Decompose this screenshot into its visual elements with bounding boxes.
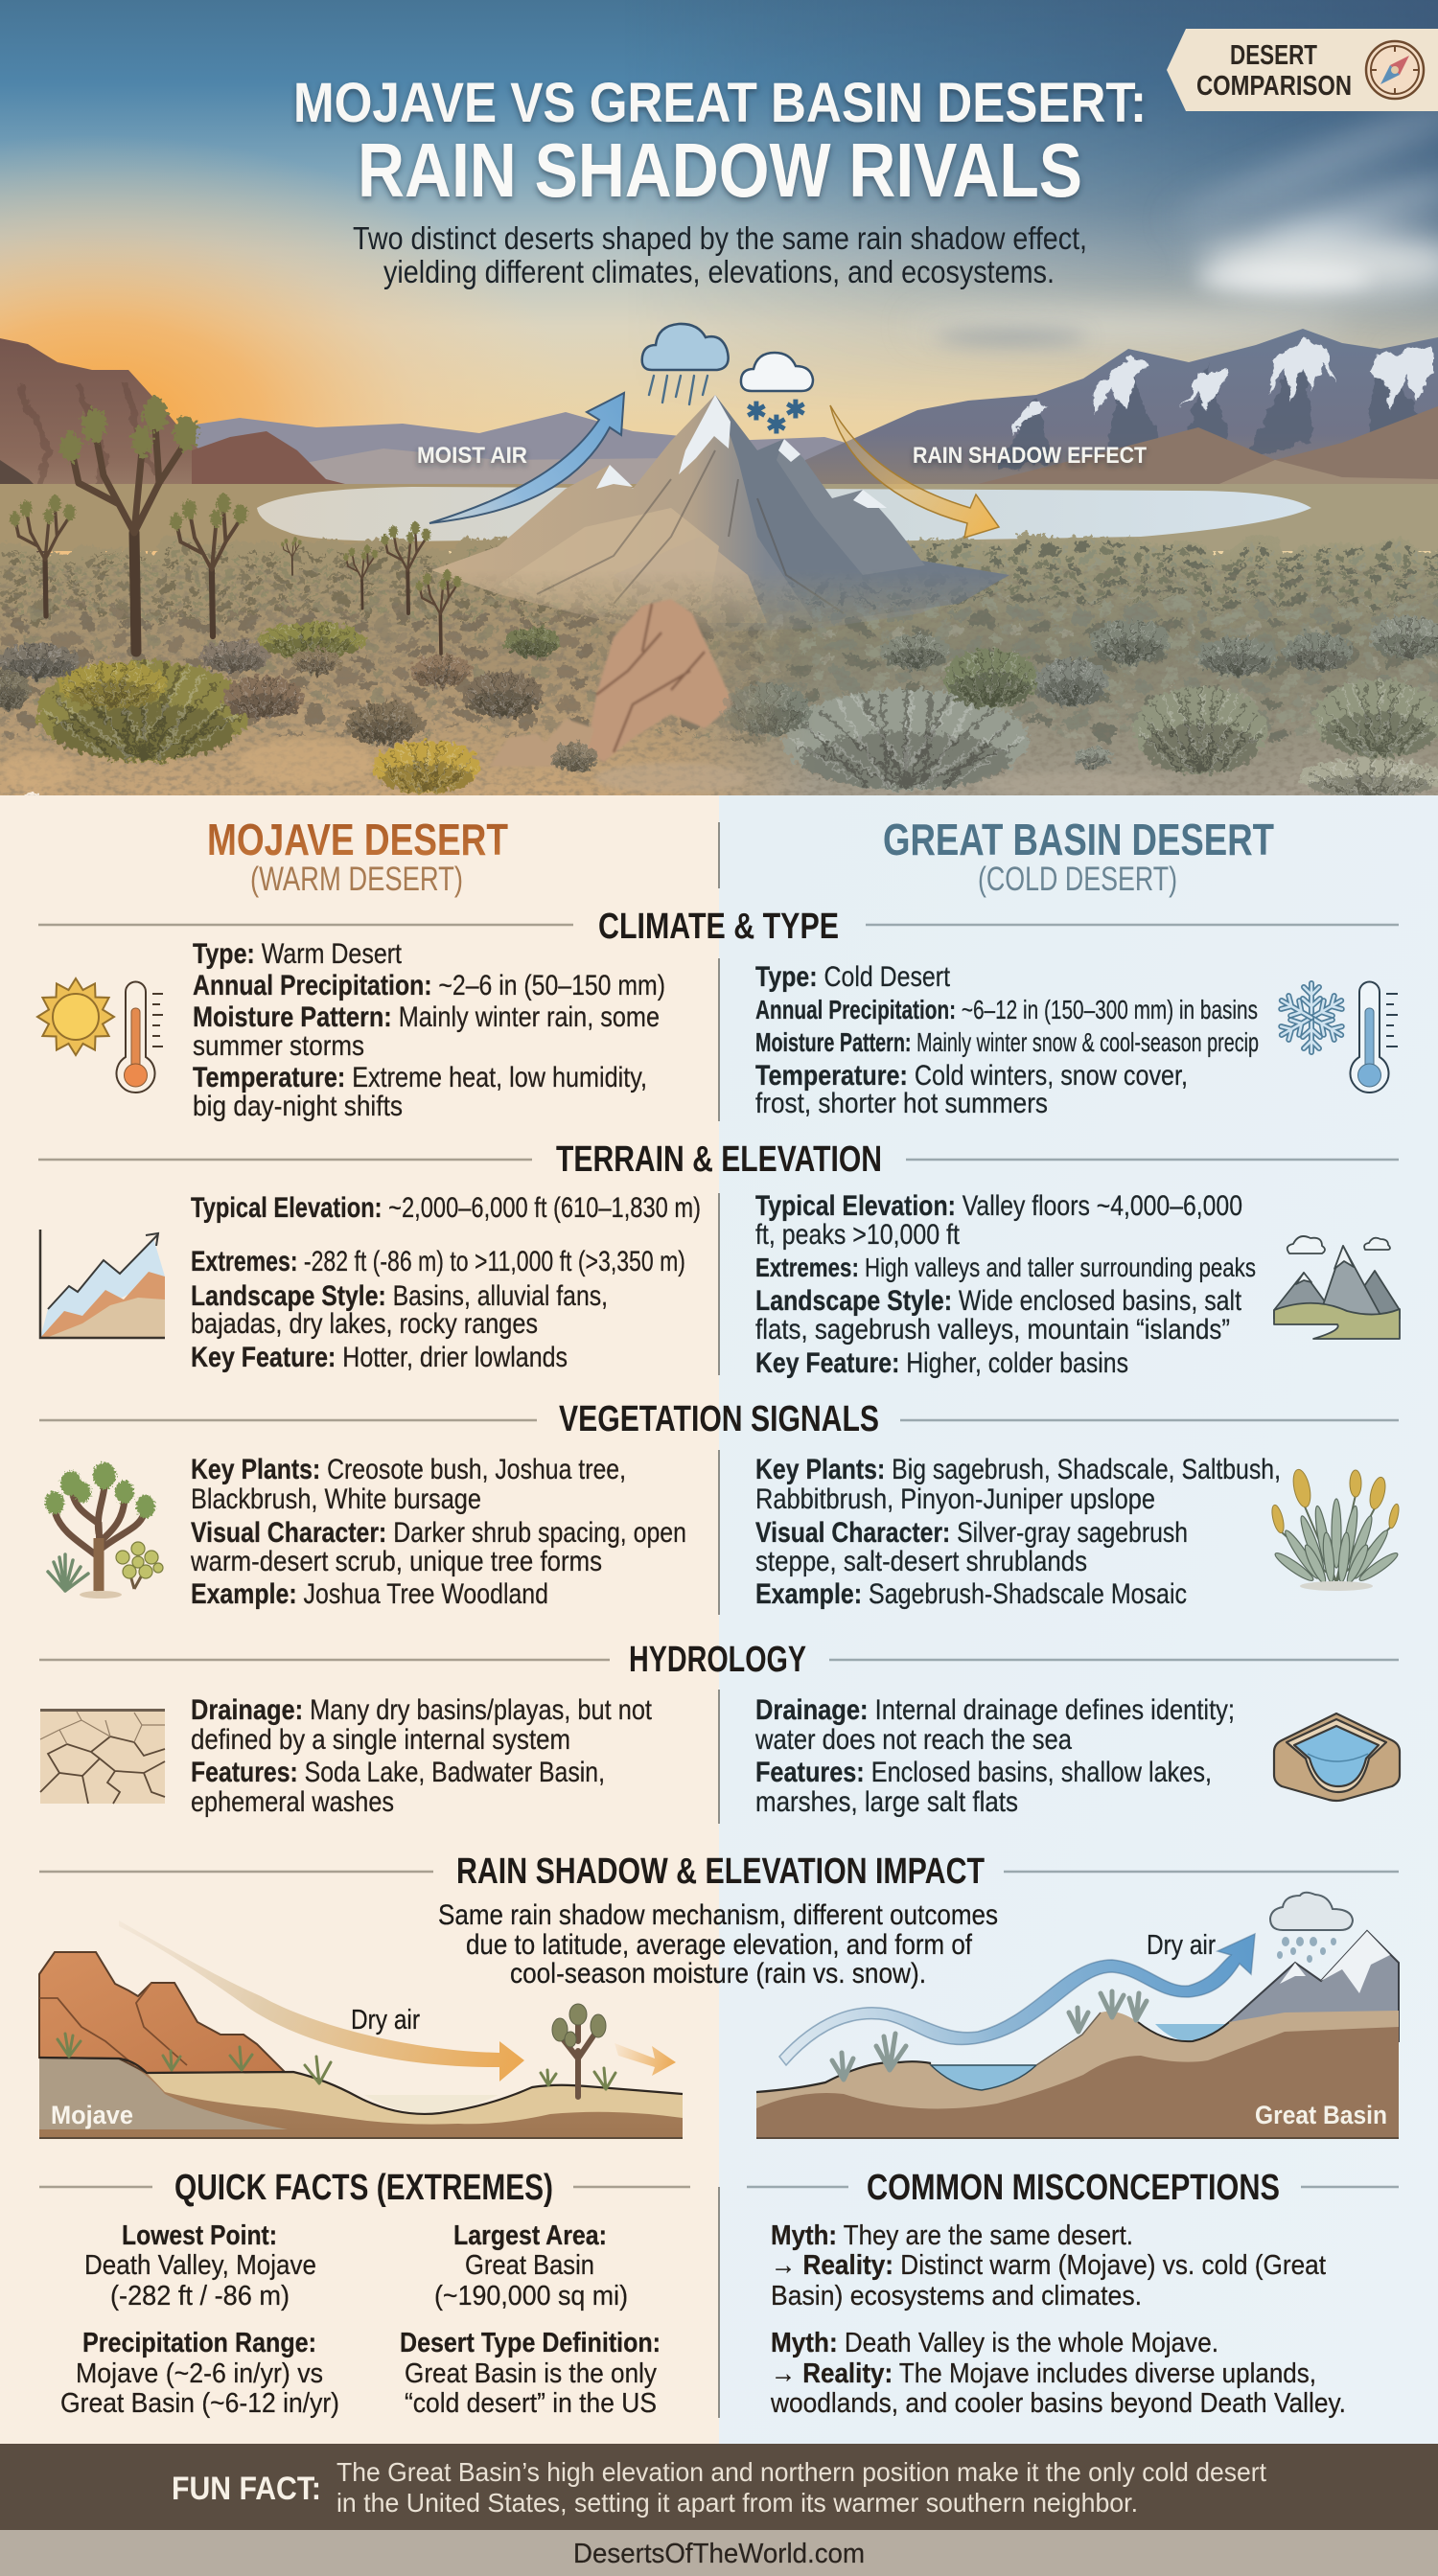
icon: snow cloud: ✱ (766, 410, 787, 439)
mountains (1229, 1931, 1399, 2041)
text: great basin climate: Annual Precipitation: ~6–12 in (150–300 mm) in basins (755, 995, 1258, 1024)
heading: great basin desert: GREAT BASIN DESERT (883, 815, 1274, 864)
label: rain shadow effect: RAIN SHADOW EFFECT (913, 443, 1147, 469)
text: great basin climate (755, 961, 1259, 1119)
text: mojave hydrology: Drainage: Many dry basins/playas, but not (191, 1694, 653, 1726)
misconception two: → Reality: The Mojave includes diverse uplands, (771, 2358, 1316, 2389)
footer (0, 2530, 1438, 2576)
diagram: great basin cross-section (756, 1893, 1399, 2138)
arrow: dry air descending (119, 1920, 524, 2082)
quick fact: lowest point: Lowest Point: (122, 2220, 277, 2251)
text: great basin climate: frost, shorter hot summers (755, 1088, 1048, 1119)
quick fact: lowest point (84, 2220, 316, 2312)
label: moist air: MOIST AIR (417, 443, 527, 469)
text: mojave terrain: Key Feature: Hotter, drier lowlands (191, 1342, 568, 1373)
icon: compass (1366, 41, 1424, 99)
icon: cold thermometer (1350, 981, 1398, 1092)
panel: great basin background (719, 795, 1438, 2444)
quick fact: desert type definition: “cold desert” in the US (405, 2388, 657, 2419)
text: mojave terrain: bajadas, dry lakes, rocky ranges (191, 1308, 538, 1340)
text: mojave vegetation (190, 1454, 686, 1610)
hero illustration: desert landscape split (0, 0, 1438, 811)
rock outcrop (489, 599, 733, 767)
ground warm side (0, 542, 987, 811)
text: mojave climate: summer storms (193, 1030, 364, 1062)
text: great basin vegetation: Key Plants: Big sagebrush, Shadscale, Saltbush, (755, 1454, 1281, 1485)
text: mojave hydrology: ephemeral washes (191, 1786, 394, 1818)
distant mountains (182, 412, 911, 508)
misconception two (770, 2328, 1346, 2419)
footer: DesertsOfTheWorld.com (573, 2539, 865, 2569)
misconception two: Myth: Death Valley is the whole Mojave. (771, 2328, 1218, 2358)
quick fact: desert type definition: Great Basin is the only (405, 2358, 657, 2389)
text: great basin terrain: flats, sagebrush valleys, mountain “islands” (755, 1314, 1230, 1346)
text: mojave vegetation: Visual Character: Darker shrub spacing, open (191, 1517, 686, 1549)
text: mojave hydrology: Features: Soda Lake, Badwater Basin, (191, 1757, 605, 1788)
text: mojave vegetation: warm-desert scrub, unique tree forms (190, 1546, 602, 1577)
text: great basin terrain: ft, peaks >10,000 ft (755, 1219, 961, 1251)
quick fact: lowest point: Death Valley, Mojave (84, 2250, 316, 2281)
icon: cloud with snow pellets (1270, 1893, 1353, 1963)
fun fact band: FUN FACT: (172, 2471, 321, 2507)
section heading: rain shadow and elevation impact: RAIN SHADOW & ELEVATION IMPACT (456, 1852, 985, 1892)
central mountain (431, 395, 1009, 632)
icon: mountains and clouds (1274, 1236, 1400, 1339)
icon: snowflake (1277, 983, 1346, 1052)
text: mojave climate: big day-night shifts (193, 1091, 403, 1122)
badge: desert comparison: DESERT (1230, 40, 1317, 71)
text: mojave vegetation: Example: Joshua Tree Woodland (191, 1578, 548, 1610)
arrow: dry air exit (615, 2043, 676, 2076)
title line 1: MOJAVE VS GREAT BASIN DESERT: (293, 72, 1147, 134)
text: mojave hydrology (191, 1694, 653, 1818)
text: great basin vegetation: steppe, salt-desert shrublands (755, 1546, 1087, 1577)
text: great basin terrain (755, 1190, 1256, 1379)
text: great basin hydrology: Drainage: Internal drainage defines identity; (755, 1694, 1235, 1726)
heading: great basin desert: (COLD DESERT) (978, 861, 1177, 898)
quick fact: desert type definition: Desert Type Definition: (400, 2328, 661, 2358)
text: rain shadow description: cool-season moisture (rain vs. snow). (510, 1958, 926, 1990)
clear dirt patches (0, 739, 1170, 795)
heading: common misconceptions: COMMON MISCONCEPTIONS (867, 2168, 1280, 2208)
fun fact band: The Great Basin’s high elevation and northern position make it the only cold desert (336, 2457, 1266, 2487)
quick fact: precipitation range (60, 2328, 339, 2419)
fun fact band (0, 2444, 1438, 2530)
text: mojave hydrology: defined by a single internal system (191, 1724, 570, 1756)
icon: elevation chart (40, 1230, 165, 1338)
text: great basin vegetation (755, 1454, 1281, 1610)
subtitle: yielding different climates, elevations, and ecosystems. (383, 254, 1055, 289)
text: great basin terrain: Extremes: High valleys and taller surrounding peaks (755, 1253, 1256, 1282)
heading: mojave desert: MOJAVE DESERT (207, 815, 508, 864)
left mountains (0, 338, 431, 565)
foreground sage shrubs (723, 616, 1438, 797)
text: rain shadow description: due to latitude, average elevation, and form of (466, 1929, 973, 1961)
misconception one: Myth: They are the same desert. (771, 2220, 1133, 2251)
ground cool side (686, 530, 1438, 795)
text: mojave vegetation: Key Plants: Creosote bush, Joshua tree, (191, 1454, 626, 1485)
icon: enclosed basin (1274, 1714, 1400, 1801)
right mountains (805, 329, 1438, 508)
heading: quick facts: QUICK FACTS (EXTREMES) (174, 2168, 553, 2208)
text: rain shadow description: Same rain shadow mechanism, different outcomes (438, 1899, 998, 1931)
label: great basin: Great Basin (1255, 2101, 1387, 2129)
quick fact: largest area: Largest Area: (453, 2220, 607, 2251)
badge: desert comparison: COMPARISON (1196, 71, 1352, 102)
label: mojave: Mojave (51, 2101, 133, 2129)
subtitle (353, 220, 1087, 289)
quick fact: precipitation range: Mojave (~2-6 in/yr) vs (76, 2358, 323, 2389)
text: great basin hydrology: marshes, large salt flats (755, 1786, 1018, 1818)
text: great basin climate: Moisture Pattern: Mainly winter snow & cool-season precip (755, 1027, 1259, 1057)
label: dry air: Dry air (1147, 1930, 1216, 1961)
sky (0, 0, 1438, 594)
icon: joshua tree small (552, 2004, 606, 2097)
quick fact: precipitation range: Precipitation Range: (82, 2328, 316, 2358)
diagram: mojave cross-section (39, 1920, 683, 2138)
icon: sagebrush (1270, 1468, 1401, 1591)
desert plants (58, 2034, 615, 2089)
quick fact: largest area: (~190,000 sq mi) (434, 2281, 628, 2312)
text: mojave terrain: Typical Elevation: ~2,000–6,000 ft (610–1,830 m) (191, 1192, 701, 1224)
text: great basin hydrology: water does not reach the sea (754, 1724, 1072, 1756)
misconception one: → Reality: Distinct warm (Mojave) vs. cold (Great (771, 2250, 1326, 2281)
text: mojave climate: Type: Warm Desert (193, 938, 403, 970)
text: great basin climate: Type: Cold Desert (755, 961, 951, 993)
icon: hot thermometer (117, 981, 163, 1092)
Joshua trees (10, 397, 461, 654)
misconception one: Basin) ecosystems and climates. (771, 2281, 1142, 2312)
icon: rain cloud (642, 324, 729, 404)
text: great basin terrain: Typical Elevation: Valley floors ~4,000–6,000 (755, 1190, 1242, 1222)
badge: desert comparison (1167, 29, 1438, 111)
icon: sun (37, 978, 114, 1055)
text: great basin vegetation: Example: Sagebrush-Shadscale Mosaic (755, 1578, 1187, 1610)
sage shrubs (832, 1991, 1147, 2080)
text: mojave climate: Moisture Pattern: Mainly winter rain, some (193, 1001, 660, 1033)
text: great basin climate: Temperature: Cold winters, snow cover, (755, 1060, 1188, 1092)
icon: cracked playa (40, 1709, 165, 1804)
ground texture (0, 565, 1438, 795)
subtitle: Two distinct deserts shaped by the same rain shadow effect, (353, 220, 1087, 256)
text: mojave terrain: Landscape Style: Basins, alluvial fans, (191, 1280, 608, 1312)
quick fact: precipitation range: Great Basin (~6-12 in/yr) (60, 2388, 339, 2419)
section heading: climate and type: CLIMATE & TYPE (598, 907, 839, 947)
text: mojave climate: Annual Precipitation: ~2–6 in (50–150 mm) (193, 970, 665, 1001)
text: great basin hydrology (754, 1694, 1235, 1818)
text: mojave vegetation: Blackbrush, White bursage (191, 1484, 481, 1515)
misconception two: woodlands, and cooler basins beyond Death Valley. (770, 2388, 1346, 2419)
text: great basin vegetation: Visual Character: Silver-gray sagebrush (755, 1517, 1188, 1549)
text: great basin terrain: Key Feature: Higher, colder basins (755, 1347, 1128, 1379)
lake (257, 487, 1311, 541)
icon: joshua tree (45, 1462, 163, 1598)
text: mojave climate (193, 938, 665, 1122)
text: great basin hydrology: Features: Enclosed basins, shallow lakes, (755, 1757, 1212, 1788)
arrow: moist air (429, 393, 624, 523)
text: mojave terrain: Extremes: -282 ft (-86 m) to >11,000 ft (>3,350 m) (191, 1246, 685, 1277)
misconception one (771, 2220, 1326, 2312)
text: rain shadow description (438, 1899, 998, 1990)
quick fact: lowest point: (-282 ft / -86 m) (110, 2281, 290, 2312)
icon: snow cloud: ✱ (746, 397, 767, 426)
foreground warm shrubs (0, 622, 598, 793)
heading: mojave desert: (WARM DESERT) (250, 861, 463, 898)
label: dry air: Dry air (351, 2005, 420, 2036)
text: mojave climate: Temperature: Extreme heat, low humidity, (193, 1062, 647, 1093)
arrow: rain shadow (830, 405, 999, 538)
quick fact: desert type definition (400, 2328, 661, 2419)
quick fact: largest area: Great Basin (465, 2250, 594, 2281)
heading: mojave desert (207, 815, 508, 898)
text: mojave terrain (191, 1192, 701, 1373)
icon: snow cloud (741, 353, 813, 439)
quick fact: largest area (434, 2220, 628, 2312)
plains behind lake (0, 484, 1438, 551)
text: great basin vegetation: Rabbitbrush, Pinyon-Juniper upslope (755, 1484, 1155, 1515)
section heading: vegetation signals: VEGETATION SIGNALS (559, 1399, 879, 1439)
title line 2: RAIN SHADOW RIVALS (358, 127, 1082, 213)
text: great basin terrain: Landscape Style: Wide enclosed basins, salt (755, 1285, 1242, 1317)
section heading: hydrology: HYDROLOGY (629, 1640, 806, 1680)
heading: great basin desert (883, 815, 1274, 898)
section heading: terrain and elevation: TERRAIN & ELEVATION (556, 1139, 882, 1180)
fun fact band: in the United States, setting it apart from its warmer southern neighbor. (336, 2488, 1138, 2518)
arrow: moist air rising (779, 1934, 1255, 2065)
panel: mojave background (0, 795, 719, 2444)
icon: snow cloud: ✱ (785, 395, 806, 424)
